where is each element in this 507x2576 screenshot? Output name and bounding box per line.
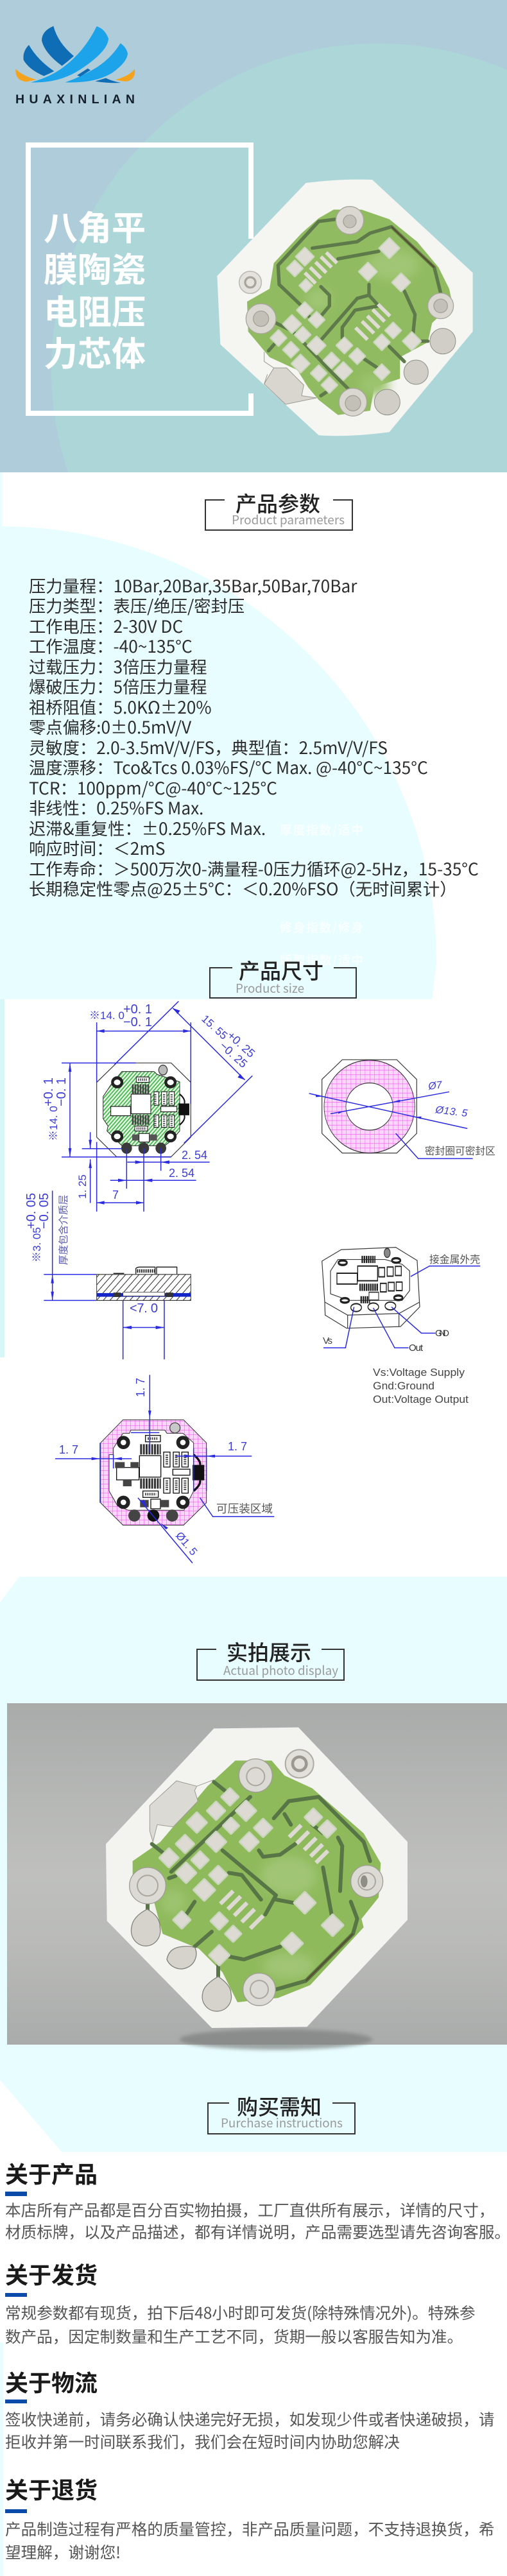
notice: about product: 本店所有产品都是百分百实物拍摄，工厂直供所有展示，详情的尺寸，: [5, 2198, 494, 2221]
drawing: press-fit area: [55, 1375, 274, 1563]
section heading: purchase instructions: 购买需知: [237, 2090, 322, 2121]
drawing: top view dimensions: +0. 05: [24, 1193, 39, 1229]
parameter list: 工作温度：-40~135°C: [29, 633, 193, 658]
notice: about shipping: [5, 2257, 476, 2348]
silver corner pad: [150, 1781, 198, 1842]
traces: [148, 1782, 370, 1989]
drawing: top view dimensions: ※14. 0: [89, 1009, 125, 1022]
drawing: top view dimensions: +0. 1: [42, 1078, 56, 1106]
filled terminals: [374, 329, 456, 415]
parameter list: 压力量程：10Bar,20Bar,35Bar,50Bar,70Bar: [29, 572, 357, 597]
hero title: 电阻压: [44, 286, 146, 334]
hero sensor photo: [217, 180, 473, 436]
pin legend: Gnd:Ground: [373, 1380, 434, 1392]
drawing: pinout perspective: Vs: [323, 1335, 332, 1346]
drawing: side view: [97, 1267, 191, 1359]
faint ghost labels: [280, 821, 363, 968]
faint ghost labels: 修身指数/修身: [280, 918, 363, 936]
faint ghost labels: 版型指数/适中: [280, 951, 363, 968]
section heading: product size: [210, 954, 356, 998]
drawing: top view dimensions: −0. 1: [55, 1078, 69, 1106]
arrowheads: [51, 1008, 245, 1300]
hero frame: [26, 142, 254, 416]
drawing: top view dimensions: 7: [112, 1189, 119, 1201]
drawing: press-fit area: 1. 7: [59, 1443, 78, 1456]
section heading: product parameters: [205, 487, 352, 530]
drawing: sealing area: [309, 1060, 495, 1158]
hero title: 膜陶瓷: [44, 243, 146, 292]
section heading: actual photo: [197, 1636, 344, 1680]
parameter list: 爆破压力：5倍压力量程: [29, 673, 207, 698]
mark: [159, 1065, 168, 1075]
drawing: top view dimensions: −0. 25: [217, 1039, 250, 1070]
outline: [97, 1063, 191, 1157]
dimension lines: [44, 1001, 252, 1300]
drawing: top view dimensions: 1. 25: [76, 1174, 89, 1199]
section heading: actual photo: Actual photo display: [223, 1662, 338, 1679]
drawing: top view dimensions: 15. 55: [199, 1013, 230, 1042]
notice: about logistics: 关于物流: [5, 2365, 98, 2398]
notice: about logistics: [5, 2365, 494, 2453]
section heading: product size: Product size: [236, 979, 304, 997]
ring terminals: [246, 207, 454, 416]
drawing: top view dimensions: 2. 54: [182, 1149, 207, 1162]
drawing: pinout perspective: GND: [435, 1328, 449, 1338]
drawing: pinout perspective: 接金属外壳: [429, 1251, 480, 1266]
photo panel: [7, 1703, 507, 2050]
drawing: top view dimensions: ※14. 0: [47, 1106, 60, 1141]
section heading: product parameters: 产品参数: [236, 487, 320, 518]
logo: HUAXINLIAN: [15, 92, 135, 107]
solder pads: [271, 239, 420, 393]
printed mark: [239, 271, 261, 293]
parameter list: 工作寿命：＞500万次0-满量程-0压力循环@2-5Hz，15-35°C: [29, 855, 479, 880]
terminals: [121, 1142, 166, 1154]
pin legend: [373, 1366, 468, 1405]
logo: [15, 26, 135, 107]
parameter list: 迟滞&重复性：±0.25%FS Max.: [29, 815, 266, 840]
drawing: press-fit area: 1. 7: [228, 1440, 247, 1453]
drawing: top view dimensions: +0. 25: [225, 1029, 257, 1060]
parameter list: TCR：100ppm/°C@-40°C~125°C: [29, 775, 277, 800]
drawing: top view dimensions: [4, 999, 507, 1577]
parameter list: 工作电压：2-30V DC: [29, 613, 183, 638]
hero title: [44, 202, 146, 376]
notice: about logistics: 签收快递前，请务必确认快递完好无损，如发现少件或者快递破损，请: [5, 2407, 494, 2430]
traces: [268, 219, 441, 396]
parameter list: 响应时间：＜2mS: [29, 835, 165, 860]
notice: about returns: [5, 2472, 494, 2563]
notice: about returns: 产品制造过程有严格的质量管控，非产品质量问题，不支持退换货，希: [5, 2517, 494, 2540]
drawing: top view dimensions: 厚度包含介质层: [56, 1195, 70, 1265]
parameter list: 祖桥阻值：5.0KΩ±20%: [29, 694, 212, 719]
notice: about product: 关于产品: [5, 2156, 98, 2190]
hero title: 八角平: [44, 202, 146, 250]
section heading: purchase instructions: Purchase instructions: [221, 2114, 343, 2131]
ring pads: [112, 1078, 175, 1141]
drawing: sealing area: Ø13. 5: [434, 1104, 468, 1119]
ceramic octagon body: [217, 180, 473, 436]
drawing: top view dimensions: +0. 1: [123, 1002, 152, 1017]
pin legend: Out:Voltage Output: [373, 1393, 468, 1405]
drawing: press-fit area: Ø1. 5: [173, 1529, 200, 1558]
green printed layer: [247, 210, 452, 415]
parameter list: 零点偏移:0±0.5mV/V: [29, 714, 192, 739]
IC pin combs: [305, 252, 390, 339]
printed mark: [286, 1749, 314, 1778]
solder pads: [160, 1789, 343, 1965]
parameter list: 温度漂移：Tco&Tcs 0.03%FS/°C Max. @-40°C~135°C: [29, 754, 428, 779]
notice: about returns: 望理解，谢谢您!: [5, 2540, 121, 2563]
section heading: product size: 产品尺寸: [239, 954, 323, 985]
green printed layer: [133, 1760, 381, 2002]
ceramic octagon: [106, 1728, 408, 2028]
drawing: top view dimensions: −0. 1: [123, 1015, 152, 1029]
notice: about logistics: 拒收并第一时间联系我们，我们会在短时间内协助您解决: [5, 2430, 400, 2453]
section heading: actual photo: 实拍展示: [227, 1636, 311, 1667]
drawing: press-fit area: 可压装区域: [216, 1500, 273, 1516]
hero title: 力芯体: [44, 327, 146, 376]
section heading: product parameters: Product parameters: [232, 511, 345, 528]
notice: about product: [5, 2156, 507, 2243]
parameter list: 过载压力：3倍压力量程: [29, 653, 207, 678]
pin legend: Vs:Voltage Supply: [373, 1366, 465, 1378]
filled terminals: [131, 1909, 231, 2011]
drawing: top view dimensions: 2. 54: [169, 1167, 194, 1180]
parameter list: 非线性：0.25%FS Max.: [29, 794, 203, 820]
parameter list: 长期稳定性零点@25±5°C：＜0.20%FSO（无时间累计）: [29, 875, 457, 900]
section heading: purchase instructions: [208, 2090, 355, 2134]
ring pads: [119, 1438, 187, 1507]
drawing: side view: <7. 0: [130, 1301, 158, 1316]
ring terminals: [130, 1759, 383, 2005]
silver corner pad: [264, 368, 316, 404]
PCB: [103, 1072, 180, 1146]
drawing: sealing area: Ø7: [427, 1079, 443, 1092]
parameter list: 压力类型：表压/绝压/密封压: [29, 592, 245, 617]
faint ghost labels: 厚度指数/适中: [280, 821, 363, 838]
notice: about shipping: 常规参数都有现货，拍下后48小时即可发货(除特殊情况外)。特殊参: [5, 2301, 476, 2324]
parameter list: 灵敏度：2.0-3.5mV/V/FS，典型值：2.5mV/V/FS: [29, 734, 388, 759]
drawing: top view dimensions: −0. 05: [37, 1193, 51, 1229]
drawing: pinout perspective: [322, 1248, 480, 1353]
notice: about shipping: 关于发货: [5, 2257, 98, 2290]
drawing: press-fit area: 1. 7: [134, 1378, 147, 1397]
notice: about product: 材质标牌，以及产品描述，都有详情说明，产品需要选型请先咨询客服。: [5, 2220, 507, 2243]
notice: about shipping: 数产品，因定制数量和生产工艺不同，货期一般以客服告知为准。: [5, 2324, 463, 2348]
drawing: pinout perspective: Out: [409, 1343, 424, 1353]
parameter list: [29, 572, 479, 900]
IC pin combs: [220, 1825, 328, 1928]
notice: about returns: 关于退货: [5, 2472, 98, 2505]
drawing: sealing area: 密封圈可密封区: [425, 1143, 495, 1158]
drawing: top view dimensions: ※3. 05: [31, 1227, 43, 1262]
